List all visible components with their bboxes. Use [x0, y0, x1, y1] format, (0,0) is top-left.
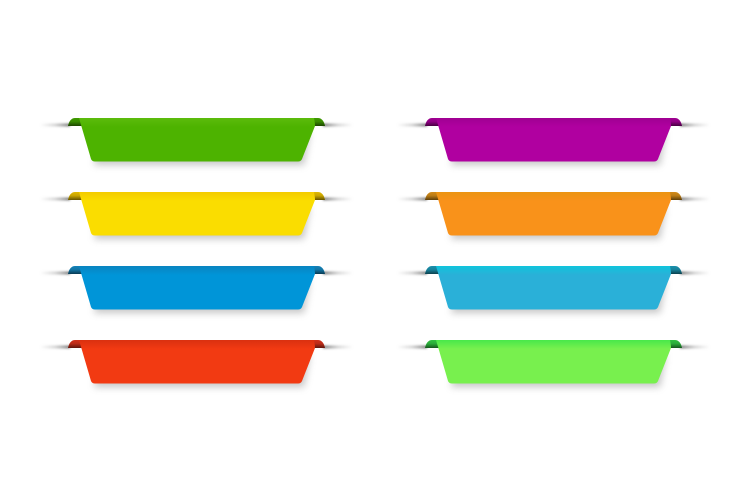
banner: cyan	[397, 266, 710, 313]
banner: green	[40, 118, 353, 165]
banner: blue	[40, 266, 353, 313]
banner: orange	[397, 192, 710, 239]
banner: red	[40, 340, 353, 387]
banner: yellow	[40, 192, 353, 239]
banner: lime	[397, 340, 710, 387]
banner: purple	[397, 118, 710, 165]
